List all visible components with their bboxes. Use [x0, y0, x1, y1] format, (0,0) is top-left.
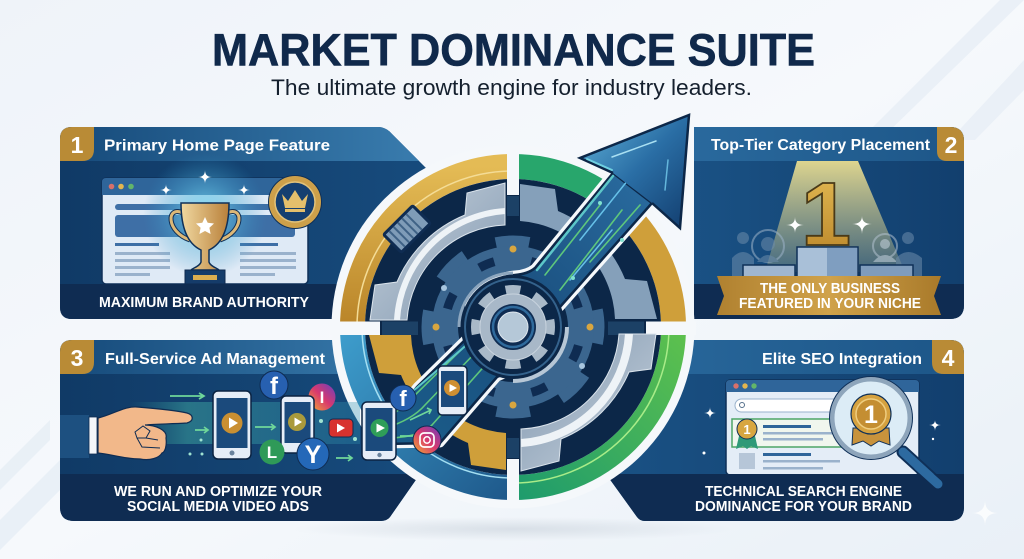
green social icon: L: [267, 443, 277, 462]
purple social icon: I: [320, 388, 324, 407]
crown seal badge: [268, 176, 322, 228]
panel 4 number badge: [932, 340, 964, 374]
ad flow graphic: [60, 366, 467, 470]
instagram icon: [413, 426, 441, 454]
panel 3 number badge: 3: [71, 345, 83, 371]
panel 4 header bar: [688, 340, 964, 374]
panel 3 caption: [114, 486, 322, 511]
phone 1: [213, 391, 251, 459]
blue social icon: Y: [305, 441, 322, 469]
ring: green quadrant: [513, 166, 626, 214]
ring: gold quadrant: [352, 166, 513, 327]
panel 1 number badge: 1: [71, 132, 84, 158]
light inner arc ring: [459, 273, 567, 381]
panel 2: top-tier category placement: [680, 127, 964, 319]
panel 2 number badge: 2: [945, 132, 957, 158]
purple social icon: [308, 384, 336, 410]
facebook icon: f: [270, 373, 279, 400]
flow band: [130, 402, 360, 444]
spotlight: [765, 161, 905, 272]
panel 3 number badge: [60, 340, 94, 374]
flow arrows: [170, 393, 431, 461]
arrow head white outline: [580, 115, 689, 228]
sparkles: [702, 407, 941, 454]
panel 1 number badge: [60, 127, 94, 161]
panel 3 caption: SOCIAL MEDIA VIDEO ADS: [127, 499, 309, 515]
glow behind trophy: [146, 161, 264, 270]
panel 2 number badge: [937, 127, 964, 161]
phone 4: [438, 366, 467, 415]
sparkles: [786, 216, 872, 234]
growth arrow shaft outline: [380, 173, 652, 444]
panel 3 header bar: [60, 340, 338, 374]
panel 1: primary home page feature: [60, 127, 450, 319]
sparkles: [160, 170, 250, 196]
growth arrow shaft: [380, 173, 652, 444]
arrow head highlights: [587, 141, 668, 190]
panel 4 number badge: 4: [942, 345, 955, 371]
arrow stream dots: [446, 201, 624, 391]
panel 3 footer: [60, 474, 440, 521]
arrow head: [580, 115, 689, 228]
middle blue gear: [427, 241, 599, 413]
decorative sparkle: [972, 500, 998, 526]
panel 4: elite seo integration: [590, 340, 964, 521]
panel 4 caption: DOMINANCE FOR YOUR BRAND: [695, 499, 912, 515]
facebook icon: [260, 371, 288, 400]
search results window: [726, 380, 919, 475]
panel 1 header bar: [60, 127, 450, 161]
outer gear segments: [369, 183, 657, 471]
white cross gaps: [330, 150, 696, 504]
central gear wheel: [330, 115, 696, 508]
panel 3 caption: WE RUN AND OPTIMIZE YOUR: [114, 484, 323, 500]
facebook icon small: f: [399, 386, 407, 411]
panel 2 footer: [680, 284, 964, 319]
small ribbon medal: [736, 419, 758, 449]
arrow stream lines: [385, 176, 640, 438]
panel 1 footer: [60, 284, 337, 319]
flow dots: [188, 419, 357, 456]
panel 4 footer: [590, 474, 964, 521]
center gear: [476, 290, 550, 364]
ring: bright green quadrant: [513, 327, 674, 488]
ring: gold right segment: [626, 214, 674, 327]
facebook icon small: [390, 385, 416, 411]
magnifying glass with medal: 1: [864, 401, 878, 429]
ring highlights: [357, 171, 669, 483]
browser window: [102, 178, 308, 284]
arrow head edge: [580, 115, 689, 228]
ring: blue quadrant: [352, 327, 513, 488]
panel 1 caption: MAXIMUM BRAND AUTHORITY: [99, 295, 309, 311]
subtitle: The ultimate growth engine for industry leaders.: [271, 75, 752, 100]
dark disc: [365, 179, 661, 475]
panel 2 caption: THE ONLY BUSINESS: [760, 281, 900, 297]
trophy: [171, 203, 239, 284]
blue social icon: [297, 438, 329, 470]
panel 4 heading: Elite SEO Integration: [762, 351, 922, 368]
magnifier handle over footer: [918, 466, 938, 484]
phone 2: [281, 396, 314, 453]
panel 2 caption: [740, 283, 920, 308]
panel 2 heading: Top-Tier Category Placement: [711, 137, 931, 154]
gold ribbon banner: [717, 276, 941, 315]
gold number one: 1: [801, 165, 851, 265]
panel 3 heading: Full-Service Ad Management: [105, 351, 326, 368]
video play icon: [329, 419, 353, 437]
panel 2 header bar: [680, 127, 964, 161]
title: MARKET DOMINANCE SUITE: [212, 24, 815, 76]
small ribbon medal: 1: [743, 422, 751, 437]
panel 4 caption: TECHNICAL SEARCH ENGINE: [705, 484, 902, 500]
podium: [743, 247, 913, 279]
panel 2 caption: FEATURED IN YOUR NICHE: [739, 296, 921, 312]
dark cross tracks: [382, 196, 644, 458]
panel 4 caption: [696, 486, 912, 511]
pointing hand: [60, 407, 192, 460]
green social icon: [260, 440, 284, 464]
phone 3: [362, 402, 396, 460]
audience silhouettes: [732, 230, 922, 276]
inner hub disc: [461, 275, 565, 379]
small tooth block: [382, 204, 432, 254]
panel 1 heading: Primary Home Page Feature: [104, 138, 330, 154]
panel 3: full-service ad management: [60, 340, 440, 521]
magnifying glass with medal: [830, 376, 938, 484]
